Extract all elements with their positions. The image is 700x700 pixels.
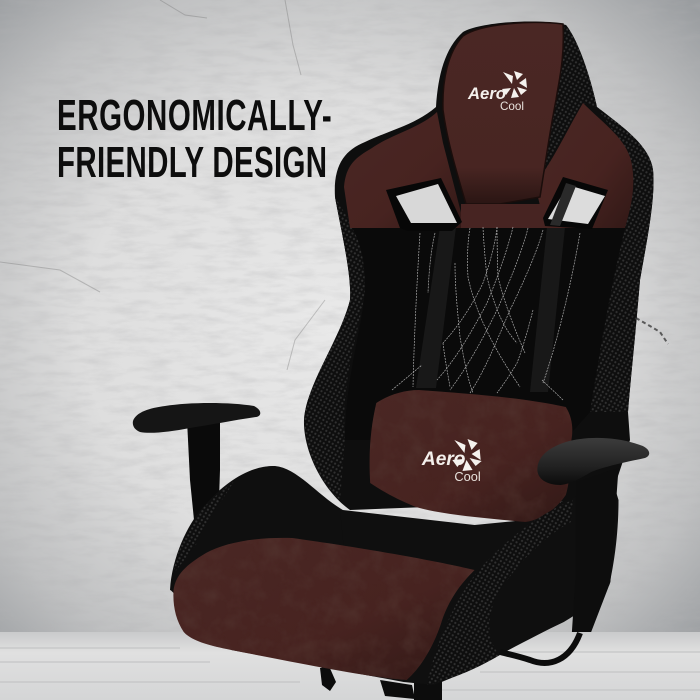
- right shoulder wing: [538, 103, 633, 228]
- center yoke: [461, 204, 545, 228]
- title: ERGONOMICALLY-: [57, 90, 332, 139]
- right armrest: [537, 438, 649, 632]
- title: [57, 90, 332, 186]
- lumbar pillow: [370, 390, 572, 522]
- lumbar logo: Cool: [454, 469, 481, 484]
- headrest logo: [467, 71, 527, 113]
- left belt hole: [386, 178, 462, 231]
- seat mesh bolsters: [173, 482, 573, 685]
- lumbar logo: Aero: [421, 449, 466, 470]
- seat shell: [171, 466, 619, 685]
- seat top panel: [173, 538, 475, 680]
- title: FRIENDLY DESIGN: [57, 137, 327, 186]
- footrest tube: [500, 633, 580, 663]
- chair base stem and casters: [320, 666, 442, 700]
- headrest logo: Cool: [500, 99, 524, 113]
- left armrest: [133, 403, 260, 530]
- backrest side mesh: [304, 25, 654, 500]
- center back panel with belts: [345, 224, 625, 440]
- lumbar logo: [421, 439, 482, 484]
- left shoulder wing: [344, 112, 465, 228]
- seat suede texture: [173, 538, 475, 680]
- headrest logo: Aero: [467, 84, 506, 103]
- chair: [133, 21, 654, 700]
- background: floor: [0, 632, 700, 700]
- seat left shell overlap: [170, 466, 345, 600]
- backrest shell: [304, 21, 654, 510]
- right belt hole: [543, 177, 608, 229]
- decorative stitching: [392, 227, 580, 400]
- headrest panel: [443, 22, 563, 204]
